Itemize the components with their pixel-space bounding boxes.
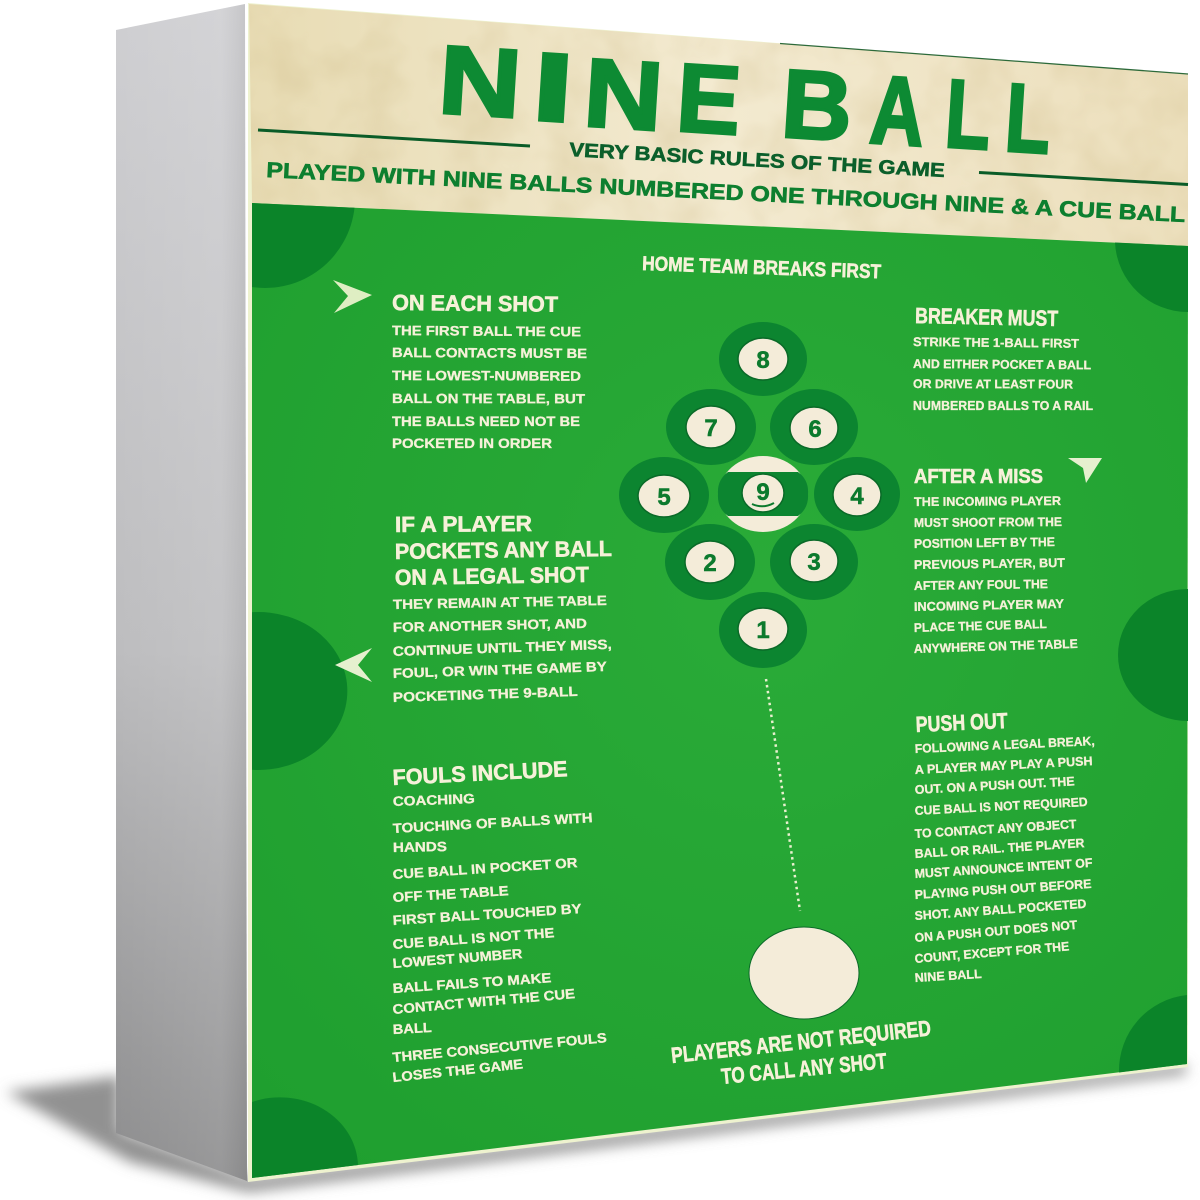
text block: after a miss: PREVIOUS PLAYER, BUT: [914, 556, 1065, 572]
text block: if a player pockets: POCKETS ANY BALL: [395, 536, 612, 564]
ball 9 striped: 9: [756, 479, 770, 506]
text block: fouls include: FOULS INCLUDE: [392, 756, 568, 790]
ball 3: [770, 524, 858, 600]
panel: green table: [252, 203, 1188, 1178]
title: I: [529, 33, 577, 143]
text block: fouls include: THREE CONSECUTIVE FOULS: [392, 1030, 607, 1065]
text block: on each shot: THE LOWEST-NUMBERED: [392, 368, 581, 384]
tagline: PLAYED WITH NINE BALLS NUMBERED ONE THROUGH NINE & A CUE BALL: [266, 158, 1186, 227]
text block: breaker must: [913, 303, 1093, 413]
text block: after a miss: THE INCOMING PLAYER: [914, 494, 1061, 509]
text block: push out: MUST ANNOUNCE INTENT OF: [914, 856, 1093, 881]
canvas front face: [248, 3, 1188, 1182]
text block: on each shot: BALL ON THE TABLE, BUT: [392, 391, 586, 406]
text block: after a miss: PLACE THE CUE BALL: [914, 617, 1047, 635]
text block: on each shot: BALL CONTACTS MUST BE: [392, 345, 587, 361]
text block: push out: NINE BALL: [914, 967, 982, 985]
title: B: [779, 49, 855, 162]
ball rack: [619, 322, 900, 668]
text block: push out: OUT. ON A PUSH OUT. THE: [914, 774, 1075, 797]
text block: fouls include: LOWEST NUMBER: [392, 946, 523, 971]
canvas side face: [116, 4, 247, 1181]
text block: after a miss: INCOMING PLAYER MAY: [914, 597, 1065, 614]
text block: push out: FOLLOWING A LEGAL BREAK,: [915, 734, 1095, 756]
ball 7: 7: [704, 415, 718, 442]
text block: if a player pockets: ON A LEGAL SHOT: [395, 562, 590, 590]
footer note: PLAYERS ARE NOT REQUIRED: [670, 1015, 932, 1068]
text block: breaker must: BREAKER MUST: [915, 303, 1059, 331]
text block: on each shot: THE FIRST BALL THE CUE: [392, 323, 581, 339]
text block: push out: BALL OR RAIL. THE PLAYER: [914, 836, 1085, 861]
title: L: [1002, 64, 1054, 175]
ball 6: [770, 389, 858, 465]
title: L: [942, 60, 994, 171]
text block: push out: A PLAYER MAY PLAY A PUSH: [914, 754, 1093, 777]
ball 2: [665, 524, 755, 600]
arrow: left pointing: [335, 648, 372, 682]
title: E: [674, 44, 744, 156]
ball 1: 1: [756, 617, 770, 644]
header rule left: [258, 130, 530, 146]
ball 9 striped: [718, 456, 808, 532]
text block: fouls include: BALL FAILS TO MAKE: [392, 970, 552, 996]
text block: if a player pockets: [393, 511, 612, 705]
text block: breaker must: STRIKE THE 1-BALL FIRST: [913, 335, 1079, 351]
text block: fouls include: CONTACT WITH THE CUE: [392, 986, 576, 1017]
text block: on each shot: THE BALLS NEED NOT BE: [392, 414, 580, 429]
ball 5: [619, 457, 709, 533]
dotted aim line: [766, 679, 800, 911]
header rule right: [979, 172, 1188, 184]
ball 3: 3: [807, 549, 821, 576]
arrow: right pointing: [333, 280, 372, 313]
ball 6: 6: [808, 416, 822, 443]
text block: if a player pockets: FOUL, OR WIN THE GAME BY: [393, 659, 607, 681]
text block: after a miss: AFTER A MISS: [914, 466, 1043, 488]
text block: fouls include: LOSES THE GAME: [392, 1056, 524, 1085]
ball 4: [814, 457, 900, 531]
heading: home team breaks first: HOME TEAM BREAKS FIRST: [642, 253, 881, 283]
text block: if a player pockets: THEY REMAIN AT THE TABLE: [393, 593, 607, 612]
text block: after a miss: MUST SHOOT FROM THE: [914, 515, 1062, 530]
title: N: [436, 26, 525, 139]
ball 8: [719, 322, 807, 396]
text block: push out: PLAYING PUSH OUT BEFORE: [914, 877, 1092, 902]
cue ball: [749, 927, 859, 1019]
ball 1: [719, 592, 807, 668]
text block: if a player pockets: FOR ANOTHER SHOT, AND: [393, 616, 587, 635]
cast shadow: [6, 1064, 1186, 1192]
text block: breaker must: AND EITHER POCKET A BALL: [913, 357, 1091, 372]
text block: fouls include: COACHING: [393, 791, 475, 809]
ball 2: 2: [703, 550, 717, 577]
footer note: [670, 1015, 932, 1089]
text block: if a player pockets: CONTINUE UNTIL THEY MISS,: [393, 637, 612, 659]
text block: breaker must: NUMBERED BALLS TO A RAIL: [913, 399, 1093, 413]
text block: fouls include: BALL: [392, 1020, 432, 1037]
title: A: [867, 56, 928, 167]
text block: fouls include: FIRST BALL TOUCHED BY: [392, 901, 582, 928]
text block: breaker must: OR DRIVE AT LEAST FOUR: [913, 377, 1073, 392]
text block: push out: CUE BALL IS NOT REQUIRED: [914, 795, 1088, 818]
arrow: down pointing: [1068, 458, 1102, 483]
footer note: TO CALL ANY SHOT: [720, 1048, 888, 1089]
text block: fouls include: CUE BALL IS NOT THE: [392, 925, 555, 952]
ball 5: 5: [657, 484, 671, 511]
text block: fouls include: TOUCHING OF BALLS WITH: [392, 810, 593, 836]
text block: fouls include: HANDS: [393, 839, 447, 855]
text block: after a miss: [914, 466, 1078, 656]
subtitle: VERY BASIC RULES OF THE GAME: [569, 139, 945, 182]
text block: fouls include: CUE BALL IN POCKET OR: [392, 855, 578, 882]
ball 7: [666, 389, 756, 465]
title: N: [581, 38, 666, 151]
text block: after a miss: ANYWHERE ON THE TABLE: [914, 637, 1078, 656]
text block: push out: ON A PUSH OUT DOES NOT: [914, 918, 1078, 945]
text block: push out: PUSH OUT: [915, 708, 1009, 737]
ball 4: 4: [850, 483, 864, 510]
text block: after a miss: AFTER ANY FOUL THE: [914, 577, 1048, 593]
text block: on each shot: POCKETED IN ORDER: [392, 436, 552, 451]
text block: push out: SHOT. ANY BALL POCKETED: [914, 897, 1087, 923]
table pockets: [252, 203, 1188, 1178]
header paper band: [249, 4, 1188, 246]
text block: if a player pockets: IF A PLAYER: [395, 511, 532, 537]
text block: fouls include: [392, 756, 607, 1085]
text block: push out: COUNT, EXCEPT FOR THE: [914, 939, 1070, 966]
text block: on each shot: [392, 290, 587, 451]
title: [436, 26, 1054, 175]
text block: push out: TO CONTACT ANY OBJECT: [914, 817, 1077, 841]
text block: fouls include: OFF THE TABLE: [392, 883, 509, 905]
text block: on each shot: ON EACH SHOT: [392, 290, 559, 317]
ball 8: 8: [756, 347, 770, 374]
text block: push out: [914, 708, 1095, 985]
text block: after a miss: POSITION LEFT BY THE: [914, 535, 1055, 551]
text block: if a player pockets: POCKETING THE 9-BALL: [393, 684, 578, 705]
